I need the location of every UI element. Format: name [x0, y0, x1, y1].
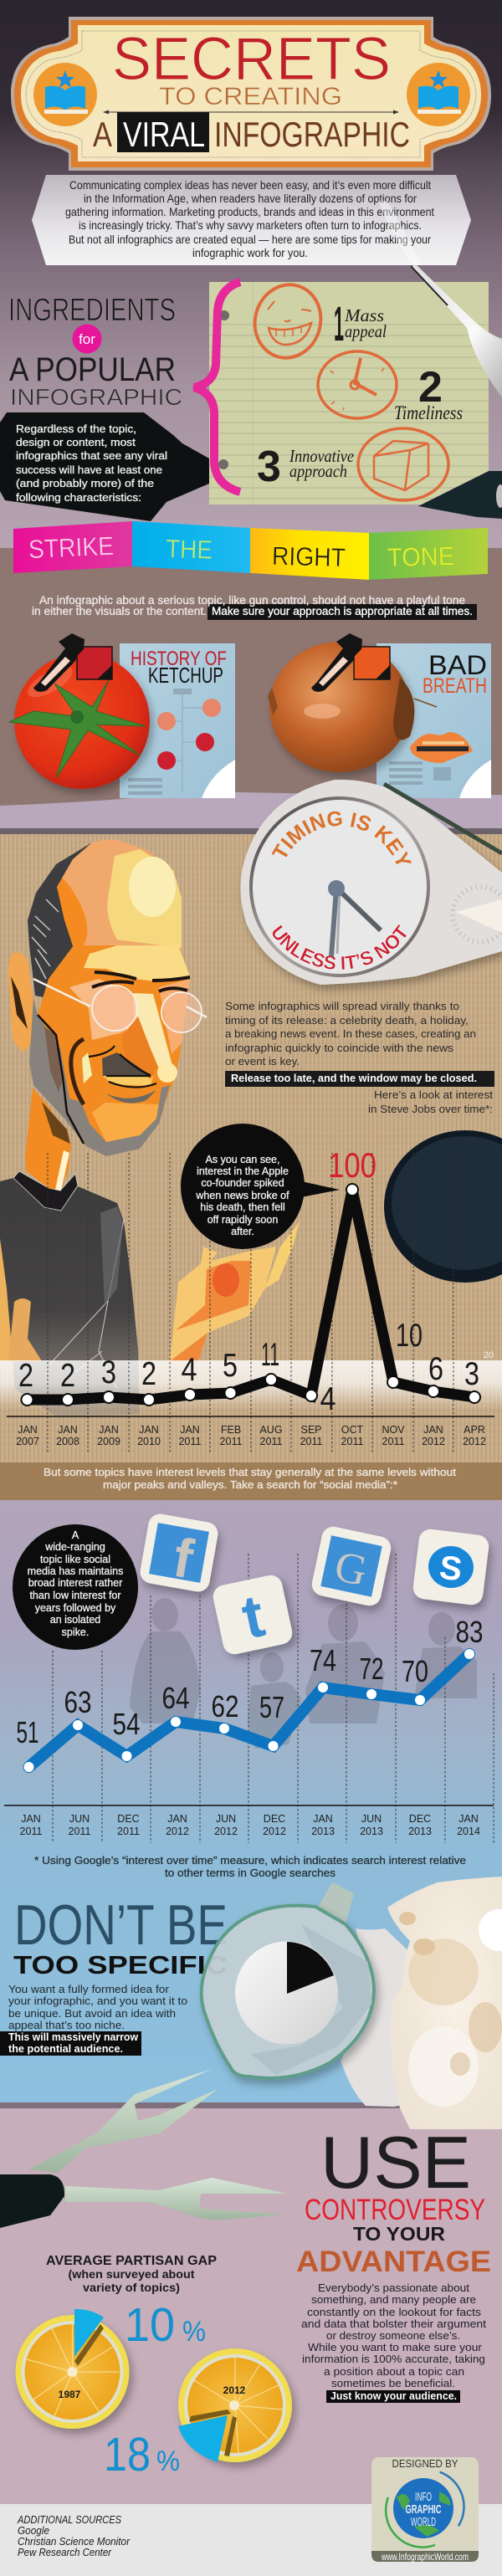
- label: appeal: appeal: [345, 321, 387, 341]
- callout: wide-ranging topic: A: [72, 1529, 79, 1541]
- beard: [29, 998, 170, 1156]
- tick label: 20: 20: [484, 1350, 494, 1360]
- background: taupe section: [0, 548, 502, 816]
- chart: interest in social media: 70: [402, 1654, 428, 1688]
- callout: wide-ranging topic: broad interest rather: [28, 1577, 122, 1589]
- goatee: [106, 1090, 156, 1104]
- chart: interest in social media: 74: [310, 1643, 336, 1677]
- icon: globe logo: GRAPHIC: [405, 2502, 442, 2517]
- x axis labels: JAN: [99, 1424, 119, 1436]
- icon: skype tile: S: [438, 1549, 464, 1588]
- value: 18 percent: 18: [104, 2428, 151, 2481]
- text: controversy copy: or destroy someone else’s.: [326, 2329, 460, 2342]
- callout: wide-ranging topic: an isolated: [50, 1614, 100, 1626]
- text: controversy copy: a position about a topic can: [324, 2365, 464, 2378]
- text: don't be too specific copy: [0, 1983, 187, 2056]
- chart: interest in social media: 63: [64, 1685, 92, 1719]
- badge: for: for: [79, 331, 95, 347]
- heading: a popular: A POPULAR: [9, 351, 176, 388]
- icon: facebook tile: f: [169, 1526, 198, 1590]
- chart: interest in Steve Jobs: 2: [18, 1358, 33, 1394]
- value: 18 percent: [104, 2428, 180, 2481]
- shirt: [0, 1178, 140, 1418]
- value: 18 percent: %: [156, 2445, 180, 2477]
- panel: intro text: infographic work for you.: [192, 246, 308, 259]
- panel: intro text: [32, 175, 471, 265]
- x axis labels: JAN: [423, 1424, 443, 1436]
- x axis labels: 2011: [300, 1436, 322, 1447]
- text: footnote: * Using Google’s “interest over time” measure, which indicates search interest relative: [34, 1854, 466, 1867]
- label: mass: Mass: [344, 305, 384, 325]
- banner: strike the right tone: STRIKE: [28, 531, 115, 564]
- x axis labels: 2011: [260, 1436, 282, 1447]
- background: white footer: [0, 2504, 502, 2576]
- ear shadow: [11, 976, 28, 1029]
- skull: [38, 840, 182, 954]
- callout: wide-ranging topic: than low interest for: [29, 1590, 121, 1601]
- x axis labels: JUN: [69, 1813, 90, 1825]
- callout: wide-ranging topic: wide-ranging: [44, 1541, 105, 1553]
- heading: to creating: TO CREATING: [159, 83, 342, 110]
- chart: interest in social media: 62: [211, 1689, 239, 1723]
- chart: interest in Steve Jobs: 4: [181, 1352, 197, 1388]
- text: controversy copy: Everybody’s passionate about: [318, 2282, 469, 2294]
- forehead shine: [129, 857, 176, 917]
- heading: secrets: SECRETS: [112, 26, 391, 93]
- icon: google tile: G: [330, 1543, 371, 1595]
- panel: history of ketchup poster: HISTORY OF: [131, 648, 227, 670]
- text: tone copy: An infographic about a serious topic, like gun control, should not have a playful tone: [39, 594, 465, 607]
- text: controversy copy: constantly on the lookout for facts: [307, 2306, 482, 2318]
- x axis labels: AUG: [259, 1424, 283, 1436]
- callout: wide-ranging topic: spike.: [62, 1626, 89, 1638]
- moustache: [102, 1052, 151, 1076]
- callout: wide-ranging topic: years followed by: [35, 1602, 116, 1614]
- text: don't be too specific copy: This will massively narrow: [8, 2031, 139, 2043]
- x axis labels: JUN: [361, 1813, 382, 1825]
- text: additional sources: ADDITIONAL SOURCES: [17, 2513, 121, 2526]
- x axis labels: JAN: [58, 1424, 78, 1436]
- callout: apple co-founder spike: when news broke of: [195, 1190, 289, 1201]
- text: don't be too specific copy: You want a fully formed idea for: [8, 1983, 170, 1995]
- icon: black utensil behind paper: [418, 471, 502, 519]
- banner: strike the right tone: TONE: [387, 541, 454, 572]
- heading: viral: VIRAL: [123, 115, 205, 154]
- text: transition caption: major peaks and valleys. Take a search for “social media”:*: [103, 1478, 397, 1491]
- x axis labels: 2009: [97, 1436, 120, 1447]
- chart: interest in Steve Jobs: 3: [464, 1356, 479, 1392]
- icon: tomato: [9, 653, 150, 789]
- x axis labels: JAN: [167, 1813, 187, 1825]
- chart: interest in Steve Jobs: 2: [60, 1358, 75, 1394]
- panel: intro text: is increasingly tricky. That’s why savvy marketers often turn to infographics.: [79, 218, 422, 232]
- text: timing copy: or event is key.: [225, 1055, 300, 1068]
- value: 10 percent: %: [182, 2316, 206, 2348]
- text: timing copy: in Steve Jobs over time*:: [368, 1103, 493, 1115]
- x axis labels: SEP: [300, 1424, 322, 1436]
- x axis labels: DEC: [409, 1813, 431, 1825]
- illustration: Steve Jobs caricature: [0, 840, 207, 1418]
- number 2: 2: [418, 363, 443, 412]
- text: additional sources: [17, 2513, 131, 2558]
- heading: infographic: INFOGRAPHIC: [214, 115, 410, 154]
- panel: bad breath poster: BAD: [428, 650, 487, 680]
- x axis labels: 2012: [422, 1436, 445, 1447]
- mouth lines: [89, 1046, 156, 1088]
- icon: globe logo: WORLD: [411, 2515, 436, 2529]
- heading: ingredients: INGREDIENTS: [8, 293, 176, 328]
- x axis labels: JAN: [180, 1424, 200, 1436]
- face: [38, 945, 190, 1156]
- chart: interest in social media: [4, 1554, 494, 1843]
- cheek peach: [69, 979, 138, 1040]
- background: lavender strip: [0, 791, 502, 834]
- background: shadow under lavender strip: [0, 828, 502, 834]
- background: blue section shadow: [0, 2102, 502, 2108]
- glasses: [33, 979, 207, 1032]
- x axis labels: 2011: [382, 1436, 404, 1447]
- icon: kitchen timer: [239, 780, 502, 994]
- text: footnote: [34, 1854, 466, 1879]
- shirt detail lines: [50, 1220, 124, 1389]
- x axis labels: JAN: [313, 1813, 333, 1825]
- value: 10 percent: 10: [125, 2298, 175, 2352]
- chart: interest in social media: 64: [162, 1681, 189, 1715]
- clock hands: [328, 880, 381, 956]
- icon: utensil notch: [496, 484, 502, 508]
- callout: apple co-founder spike: off rapidly soon: [207, 1214, 278, 1226]
- icon: globe logo: [386, 2467, 474, 2548]
- forehead glow: [107, 849, 182, 948]
- chart: interest in social media: 57: [259, 1690, 284, 1724]
- heading: average partisan gap: [46, 2254, 217, 2294]
- text: tone copy: [32, 594, 477, 620]
- icon: facebook tile: [138, 1512, 220, 1594]
- title badge: [11, 17, 491, 171]
- heading: infographic: INFOGRAPHIC: [10, 384, 182, 410]
- arrow rule: [103, 110, 399, 114]
- x axis labels: 2011: [69, 1826, 90, 1837]
- label: timeliness: Timeliness: [394, 402, 463, 423]
- x axis labels: 2012: [166, 1826, 189, 1837]
- panel: intro text: But not all infographics are created equal — here are some tips for making your: [69, 233, 431, 246]
- icon: smiling face sketch: [247, 277, 329, 366]
- panel: black spatula with text: (and probably more) of the: [16, 477, 154, 489]
- callout: apple co-founder spike: co-founder spiked: [201, 1177, 284, 1189]
- icon: right book medallion: [407, 63, 470, 126]
- lower face light: [92, 1103, 159, 1142]
- heading: advantage: ADVANTAGE: [296, 2246, 491, 2278]
- chart: interest in Steve Jobs: 6: [428, 1351, 443, 1387]
- x axis labels: 2011: [20, 1826, 42, 1837]
- forehead highlight: [84, 945, 190, 981]
- label: unless it's not: UNLESS IT’S NOT: [273, 924, 407, 970]
- neck: [25, 1088, 71, 1191]
- icon: spoon handle: [378, 201, 502, 397]
- text: timing copy: Some infographics will spread virally thanks to: [225, 1000, 459, 1012]
- heading: viral highlight box: [117, 112, 209, 152]
- panel: black spatula with text: following characteristics:: [16, 491, 141, 504]
- heading: a: A: [93, 115, 112, 154]
- chart: lemon pie 1987: [15, 2309, 129, 2429]
- badge: for: [72, 325, 102, 353]
- x axis labels: 2007: [16, 1436, 39, 1447]
- panel: designed by badge: www.InfographicWorld.com: [381, 2551, 469, 2563]
- panel: designed by badge: [371, 2457, 479, 2563]
- banner: strike the right tone: [13, 521, 488, 580]
- heading: to your: TO YOUR: [353, 2223, 445, 2245]
- panel: history of ketchup poster: [120, 643, 235, 798]
- nose side shade: [121, 1017, 157, 1079]
- chart: interest in Steve Jobs: 2: [141, 1356, 156, 1392]
- text: don't be too specific copy: be unique. But avoid an idea with: [8, 2007, 176, 2020]
- icon: timer knob: [453, 887, 502, 942]
- jaw brown shadow: [44, 1027, 63, 1092]
- x axis labels: JAN: [21, 1813, 41, 1825]
- panel: notebook paper: [209, 277, 489, 504]
- ear: [8, 952, 33, 1052]
- panel: black spatula with text: design or content, most: [16, 436, 136, 448]
- panel: intro text: in the Information Age, when readers have literally dozens of options for: [84, 192, 417, 205]
- background: dark to mauve paper: [0, 0, 502, 552]
- left edge hand: [0, 1242, 12, 1361]
- chart: interest in social media: 72: [360, 1652, 383, 1686]
- heading: average partisan gap: variety of topics): [83, 2281, 180, 2294]
- neck highlight: [55, 1150, 69, 1191]
- x axis labels: JAN: [458, 1813, 479, 1825]
- panel: black spatula with text: Regardless of the topic,: [16, 423, 136, 435]
- callout: apple co-founder spike: interest in the Apple: [197, 1165, 289, 1177]
- x axis labels: 2014: [457, 1826, 480, 1837]
- illustration: flour pile: [341, 1877, 502, 2129]
- text: footnote: to other terms in Google searches: [165, 1867, 336, 1879]
- background: mauve section: [0, 2102, 502, 2504]
- icon: carving fork: [0, 2069, 288, 2228]
- x axis labels: FEB: [221, 1424, 241, 1436]
- panel: notebook paper: 1: [334, 297, 344, 351]
- hand on shirt: [8, 1298, 42, 1361]
- x axis labels: 2011: [341, 1436, 363, 1447]
- illustration: orange hand: [170, 1221, 300, 1361]
- text: controversy copy: sometimes be beneficial.: [331, 2377, 455, 2389]
- background: wood panel: [0, 834, 502, 1462]
- x axis labels: 2011: [179, 1436, 201, 1447]
- callout: apple co-founder spike: his death, then fell: [200, 1201, 285, 1213]
- chart: lemon pie 2012: [178, 2348, 292, 2462]
- icon: left book medallion: [33, 63, 97, 126]
- neck shadow: [42, 1102, 70, 1144]
- text: timing copy: a breaking news event. In these cases, creating an: [225, 1027, 476, 1040]
- icon: google tile: [310, 1524, 393, 1608]
- icon: twitter tile: [211, 1573, 295, 1657]
- panel: history of ketchup poster: KETCHUP: [148, 663, 223, 688]
- value: 10 percent: [125, 2298, 206, 2352]
- x axis labels: [20, 1813, 480, 1837]
- collar: [13, 1171, 78, 1211]
- x axis labels: 2012: [214, 1826, 238, 1837]
- icon: dropper and red swatch: [33, 633, 112, 692]
- icon: clock sketch: [318, 351, 397, 418]
- icon: measuring cup pie chart: [202, 1882, 374, 2078]
- heading: use: USE: [320, 2121, 471, 2204]
- x axis labels: [16, 1424, 486, 1447]
- callout: wide-ranging topic: [13, 1524, 138, 1650]
- cheek curve: [71, 1039, 84, 1104]
- text: tone copy: Make sure your approach is appropriate at all times.: [212, 605, 473, 617]
- x axis labels: 2012: [263, 1826, 286, 1837]
- text: additional sources: Pew Research Center: [18, 2546, 112, 2558]
- shirt highlight: [100, 1206, 123, 1305]
- text: don't be too specific copy: the potential audience.: [8, 2042, 123, 2055]
- upper lip yellow: [103, 1076, 153, 1086]
- text: controversy copy: and data that bolster their argument: [301, 2317, 486, 2330]
- x axis labels: JAN: [139, 1424, 159, 1436]
- x axis labels: 2013: [360, 1826, 383, 1837]
- text: timing copy: infographic quickly to coincide with the news: [225, 1042, 454, 1054]
- background: lavender to blue section: [0, 1500, 502, 2102]
- x axis labels: 2008: [56, 1436, 79, 1447]
- text: tone copy: in either the visuals or the content.: [32, 605, 207, 617]
- heading: don't be: DON’T BE: [14, 1893, 228, 1957]
- callout: apple co-founder spike: after.: [231, 1226, 254, 1237]
- chart: interest in Steve Jobs: 10: [396, 1318, 423, 1354]
- chart: lemon pie 1987: 1987: [59, 2389, 81, 2400]
- panel: intro text: Communicating complex ideas has never been easy, and it’s even more difficult: [69, 178, 431, 192]
- x axis labels: JUN: [216, 1813, 236, 1825]
- callout: apple co-founder spike: As you can see,: [206, 1154, 279, 1165]
- illustration: grey people silhouettes: [130, 1598, 477, 1749]
- text: controversy copy: While you want to make sure your: [308, 2341, 483, 2353]
- panel: intro text: gathering information. Marketing products, brands and ideas in this environment: [65, 205, 434, 218]
- text: additional sources: Google: [18, 2524, 49, 2537]
- banner: strike the right tone: THE: [166, 534, 213, 565]
- x axis labels: DEC: [264, 1813, 285, 1825]
- chart: interest in Steve Jobs: [7, 1145, 494, 1453]
- text: timing copy: timing of its release: a celebrity death, a holiday,: [225, 1014, 469, 1027]
- text: controversy copy: Just know your audience.: [330, 2389, 457, 2402]
- panel: black spatula with text: infographics that see any viral: [16, 449, 167, 462]
- icon: skype tile: [412, 1528, 490, 1606]
- callout: apple co-founder spike: [181, 1124, 340, 1249]
- icon: cube sketch: [358, 428, 448, 500]
- x axis labels: OCT: [341, 1424, 364, 1436]
- chart: interest in Steve Jobs: 4: [320, 1381, 336, 1417]
- x axis labels: DEC: [117, 1813, 140, 1825]
- x axis labels: 2011: [220, 1436, 242, 1447]
- icon: onion: [268, 642, 437, 772]
- eyebrows: [92, 972, 190, 991]
- jaw black line: [38, 1015, 84, 1144]
- x axis labels: APR: [464, 1424, 485, 1436]
- label: innovative: Innovative: [289, 446, 354, 466]
- icon: globe logo: INFO: [415, 2490, 432, 2504]
- panel: bad breath poster: [376, 643, 491, 798]
- text: controversy copy: [301, 2282, 486, 2403]
- background: brown caption band: [0, 1462, 502, 1500]
- icon: pink brace: [194, 282, 240, 492]
- icon: frying pan: [384, 1130, 502, 1283]
- x axis labels: NOV: [382, 1424, 405, 1436]
- chart: interest in social media: 83: [455, 1615, 484, 1649]
- nose: [134, 993, 173, 1068]
- panel: designed by badge: DESIGNED BY: [392, 2457, 458, 2470]
- icon: dropper and orange swatch: [311, 633, 390, 692]
- text: don't be too specific copy: appeal that’s too niche.: [8, 2019, 125, 2031]
- chart: interest in Steve Jobs: 11: [261, 1337, 279, 1373]
- chart: interest in social media: 54: [112, 1707, 141, 1741]
- x axis labels: 2011: [117, 1826, 140, 1837]
- text: timing copy: Here’s a look at interest: [374, 1088, 493, 1101]
- chart: lemon pie 2012: 2012: [223, 2384, 246, 2396]
- text: controversy copy: something, and many people are: [311, 2293, 476, 2306]
- x axis labels: 2012: [463, 1436, 486, 1447]
- callout: wide-ranging topic: media has maintains: [28, 1565, 123, 1577]
- x axis labels: JAN: [18, 1424, 38, 1436]
- skull orange stripe: [57, 873, 87, 954]
- text: timing copy: [225, 1000, 494, 1115]
- text: timing copy: Release too late, and the window may be closed.: [231, 1072, 477, 1084]
- callout: wide-ranging topic: topic like social: [40, 1554, 110, 1565]
- text: transition caption: [44, 1466, 456, 1491]
- text: controversy copy: information is 100% accurate, taking: [302, 2353, 485, 2365]
- number 3: 3: [257, 443, 281, 491]
- x axis labels: 2010: [137, 1436, 161, 1447]
- icon: twitter tile: t: [237, 1582, 270, 1652]
- heading: average partisan gap: AVERAGE PARTISAN GAP: [46, 2254, 217, 2268]
- banner: strike the right tone: RIGHT: [272, 541, 346, 572]
- chart: interest in social media: 51: [17, 1715, 38, 1749]
- hair: [28, 842, 92, 997]
- right cheek: [159, 979, 190, 1054]
- text: don't be too specific copy: your infographic, and you want it to: [8, 1995, 187, 2007]
- x axis labels: 2013: [311, 1826, 335, 1837]
- panel: black spatula with text: success will have at least one: [16, 463, 162, 476]
- panel: black spatula with text: [0, 412, 209, 521]
- heading: average partisan gap: (when surveyed about: [69, 2267, 195, 2281]
- hair streaks: [32, 899, 59, 979]
- text: transition caption: But some topics have interest levels that stay generally at the same levels without: [44, 1466, 456, 1478]
- text: additional sources: Christian Science Monitor: [18, 2535, 131, 2548]
- chart white band: [0, 1360, 502, 1411]
- heading: too specific: TOO SPECIFIC: [13, 1950, 228, 1979]
- label: timing is key: TIMING IS KEY: [271, 812, 412, 864]
- x axis labels: 2013: [408, 1826, 432, 1837]
- chart: interest in Steve Jobs: 5: [223, 1348, 238, 1384]
- value label: 100: 100: [328, 1145, 376, 1185]
- label: approach: approach: [289, 461, 347, 481]
- chart: interest in Steve Jobs: 3: [101, 1355, 116, 1390]
- cheek highlight: [82, 1052, 92, 1083]
- nose tip: [157, 1063, 177, 1083]
